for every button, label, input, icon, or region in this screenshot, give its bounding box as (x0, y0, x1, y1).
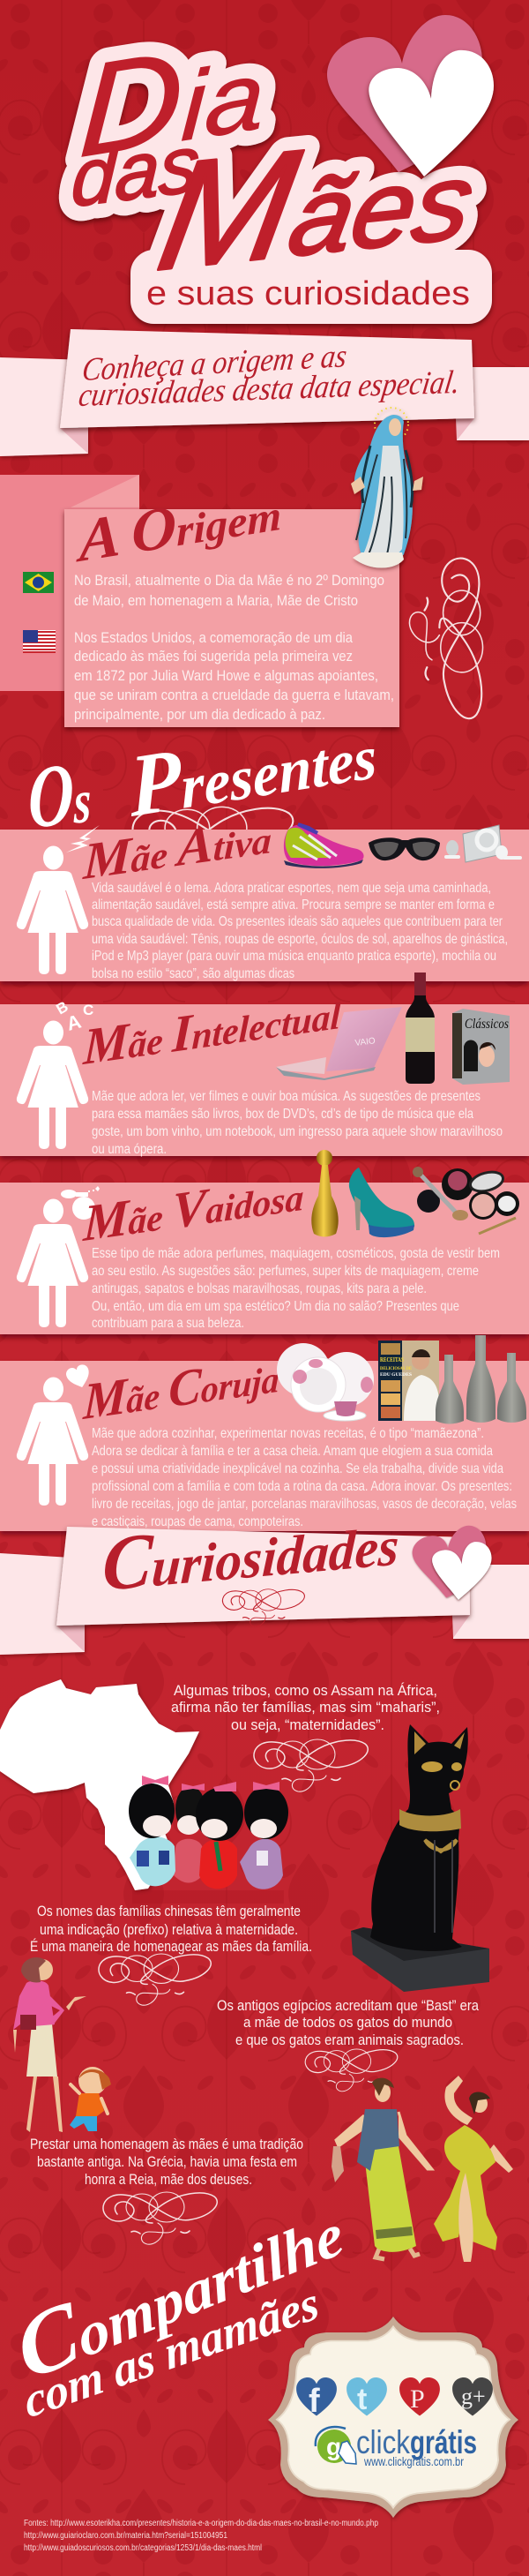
icon: pink laptop (276, 1007, 402, 1080)
ornament: vertical swirl (409, 559, 483, 718)
icon: perfume bottle (311, 1150, 339, 1237)
text: Greece: honra a Reia, mãe dos deuses. (85, 2171, 252, 2188)
heading: Mãe Ativa: Mãe Ativa (82, 807, 272, 891)
logo: clickgrátis: click (356, 2424, 410, 2460)
icon: woman (17, 1198, 88, 1327)
icon: sunglasses (369, 837, 440, 860)
ribbon banner: intro (0, 329, 529, 456)
origin text: que se uniram contra a crueldade da guerra e lutavam, (74, 687, 394, 703)
band: Mãe Intelectual (0, 973, 529, 1157)
text: Bast (217, 1997, 479, 2048)
text: Assam: Algumas tribos, como os Assam na África, (174, 1682, 437, 1699)
doll red (196, 1782, 243, 1889)
icon: pink laptop: VAIO (354, 1036, 376, 1048)
illustration: Virgin Mary (351, 408, 423, 568)
text: Mãe Ativa: bolsa no estilo “saco”, são algumas dicas (92, 966, 294, 981)
icon: small hearts (413, 1526, 492, 1600)
ornament: red swirl (222, 1589, 304, 1626)
icon: Google plus heart (452, 2377, 493, 2416)
panel: A Origem (0, 475, 399, 727)
origin text: Nos Estados Unidos, a comemoração de um dia (74, 629, 353, 646)
icon: DVD box: Clássicos (465, 1017, 509, 1032)
illustration: mother and child (13, 1957, 111, 2132)
text: Mãe Vaidosa: antirugas, sapatos e bolsas maravilhosas, roupas, kits para a pele. (92, 1281, 427, 1296)
title sticker: Dia das Mães e suas curiosidades: Mães (147, 98, 489, 303)
icon: vases (436, 1335, 526, 1424)
icon: woman (17, 1377, 88, 1506)
text: Mãe Intelectual: ou uma ópera. (92, 1142, 167, 1157)
icon: cookbook (378, 1341, 439, 1421)
title text (70, 10, 489, 303)
doll blue (129, 1776, 175, 1886)
text: Mãe Ativa (92, 881, 508, 981)
icon: letters ABC (53, 998, 93, 1035)
ornament: swirl 1 (254, 1739, 368, 1791)
ornament: swirl 4 (103, 2192, 217, 2244)
icon: small heart (64, 1363, 93, 1391)
heading: Os Presentes: Os (28, 742, 91, 847)
banner text (77, 337, 462, 413)
text: Bast: e que os gatos eram animais sagrados. (235, 2032, 464, 2048)
origin text: principalmente, por um dia dedicado à paz. (74, 706, 325, 723)
icon: Brazil flag (23, 572, 54, 593)
logo: clickgrátis: www.clickgratis.com.br (363, 2454, 464, 2468)
icon: mp3 player (446, 825, 520, 862)
ornament: swirl under Os Presentes (132, 807, 293, 881)
title sticker: Dia das Mães e suas curiosidades: Dia (76, 10, 269, 185)
icon: lightning (66, 825, 100, 852)
text: Assam: afirma não ter famílias, mas sim “maharis”, (171, 1699, 440, 1716)
icon: Facebook heart (296, 2377, 337, 2420)
icon: Twitter heart (346, 2377, 387, 2416)
text: Mãe Vaidosa (92, 1246, 500, 1331)
icon: letters ABC: A (64, 1010, 84, 1035)
icon: woman (17, 845, 88, 974)
text: Greece: bastante antiga. Na Grécia, havia uma festa em (37, 2153, 297, 2170)
hearts (327, 15, 494, 176)
banner text: curiosidades desta data especial. (77, 364, 462, 413)
band: Mãe Coruja (0, 1335, 529, 1531)
badge: share panel (268, 2317, 518, 2518)
icon: cookbook: EDU GUEDES (380, 1373, 412, 1378)
text: Chinese families: uma indicação (prefixo) relativa à maternidade. (40, 1921, 298, 1938)
text: Assam (171, 1682, 440, 1733)
logo: clickgrátis: grátis (410, 2424, 477, 2460)
icon: perfume spray (61, 1186, 100, 1220)
heading: Mãe Vaidosa: Mãe Vaidosa (82, 1164, 305, 1252)
illustration: Bastet cat statue (351, 1724, 489, 1992)
band: Mãe Ativa (0, 807, 529, 981)
icon: makeup set (413, 1167, 519, 1234)
ornament: swirl 3 (305, 2049, 398, 2092)
text: Chinese families (30, 1903, 312, 1955)
subtitle: e suas curiosidades (146, 275, 470, 312)
origin text: em 1872 por Julia Ward Howe e algumas apoiantes, (74, 667, 378, 684)
sources: http://www.guiarioclaro.com.br/materia.htm?serial=151004951 (24, 2531, 227, 2541)
icon: Facebook heart: f (309, 2383, 320, 2420)
logo: clickgrátis: g (326, 2433, 341, 2460)
heading: Os Presentes: Presentes (126, 699, 378, 837)
icon: Pinterest heart: P (410, 2384, 425, 2414)
origin text (74, 572, 394, 723)
illustration: kokeshi dolls (129, 1776, 288, 1904)
doll pink (174, 1784, 205, 1883)
origin text: dedicado às mães foi sugerida pela primeira vez (74, 648, 353, 665)
ribbon banner: Curiosidades (0, 1495, 529, 1655)
heading: Os Presentes (28, 699, 378, 847)
icon: cookbook: RECEITAS (380, 1356, 404, 1363)
text: Mãe Coruja: e castiçais, roupas de cama, compoteiras. (92, 1514, 303, 1529)
icon: cookbook: DELICIOSAS DE (380, 1367, 413, 1371)
icon: dinner plates (277, 1343, 374, 1421)
icon: Twitter heart: t (357, 2383, 367, 2416)
text: Mãe Coruja (92, 1426, 517, 1529)
heading: Compartilhe com as mamães: Compartilhe (7, 2175, 351, 2400)
title sticker: Dia das Mães e suas curiosidades (70, 10, 494, 312)
doll purple (240, 1782, 288, 1889)
icon: Google plus heart: g+ (461, 2384, 486, 2409)
illustration: Greek women (332, 2076, 513, 2262)
heading: Mãe Intelectual: Mãe Intelectual (82, 982, 342, 1076)
text: Chinese families: É uma maneira de homenagear as mães da família. (30, 1938, 312, 1955)
band: Mãe Vaidosa (0, 1150, 529, 1334)
title text: das (70, 119, 201, 224)
icon: Pinterest heart (399, 2377, 440, 2416)
text: Greece: Prestar uma homenagem às mães é uma tradição (30, 2136, 303, 2152)
heading: Curiosidades: Curiosidades (101, 1495, 401, 1607)
origin text: de Maio, em homenagem a Maria, Mãe de Cristo (74, 592, 358, 609)
title sticker: Dia das Mães e suas curiosidades: das (70, 119, 201, 224)
heading: A Origem: A Origem (75, 477, 282, 575)
text: Assam: ou seja, “maternidades”. (231, 1716, 384, 1733)
icon: USA flag (23, 630, 56, 653)
text: Bast: Os antigos egípcios acreditam que “Bast” era (217, 1997, 479, 2014)
origin text: No Brasil, atualmente o Dia da Mãe é no 2º Domingo (74, 572, 384, 589)
icon: woman (17, 1020, 88, 1149)
text: Mãe Intelectual (92, 1089, 503, 1157)
ornament: swirl 2 (99, 1954, 211, 2005)
icon: wine bottle (406, 973, 435, 1084)
sources: http://www.guiadoscuriosos.com.br/categorias/1253/1/dia-das-maes.html (24, 2543, 262, 2553)
sources: Fontes: http://www.esoterikha.com/presentes/historia-e-a-origem-do-dia-das-maes-no-brasil-e-no-mundo.php (24, 2519, 378, 2528)
title text: Mães (147, 98, 489, 303)
sources (24, 2519, 378, 2553)
text: Mãe Vaidosa: contribuam para a sua beleza. (92, 1316, 244, 1331)
map: Africa (0, 1679, 199, 1890)
text: Greece (30, 2136, 303, 2188)
icon: letters ABC: B (53, 998, 71, 1018)
icon: teal high heel (349, 1168, 414, 1237)
icon: DVD box (452, 1009, 510, 1085)
text: Bast: a mãe de todos os gatos do mundo (243, 2014, 452, 2031)
title text: Dia (76, 10, 269, 185)
text: Chinese families: Os nomes das famílias chinesas têm geralmente (37, 1903, 301, 1919)
icon: letters ABC: C (83, 1002, 93, 1018)
heading: Compartilhe com as mamães: com as mamães (20, 2275, 323, 2429)
logo: clickgrátis (316, 2424, 477, 2468)
banner text: Conheça a origem e as (80, 337, 349, 387)
icon: running shoe (284, 824, 364, 868)
heading: Mãe Coruja: Mãe Coruja (82, 1346, 280, 1431)
